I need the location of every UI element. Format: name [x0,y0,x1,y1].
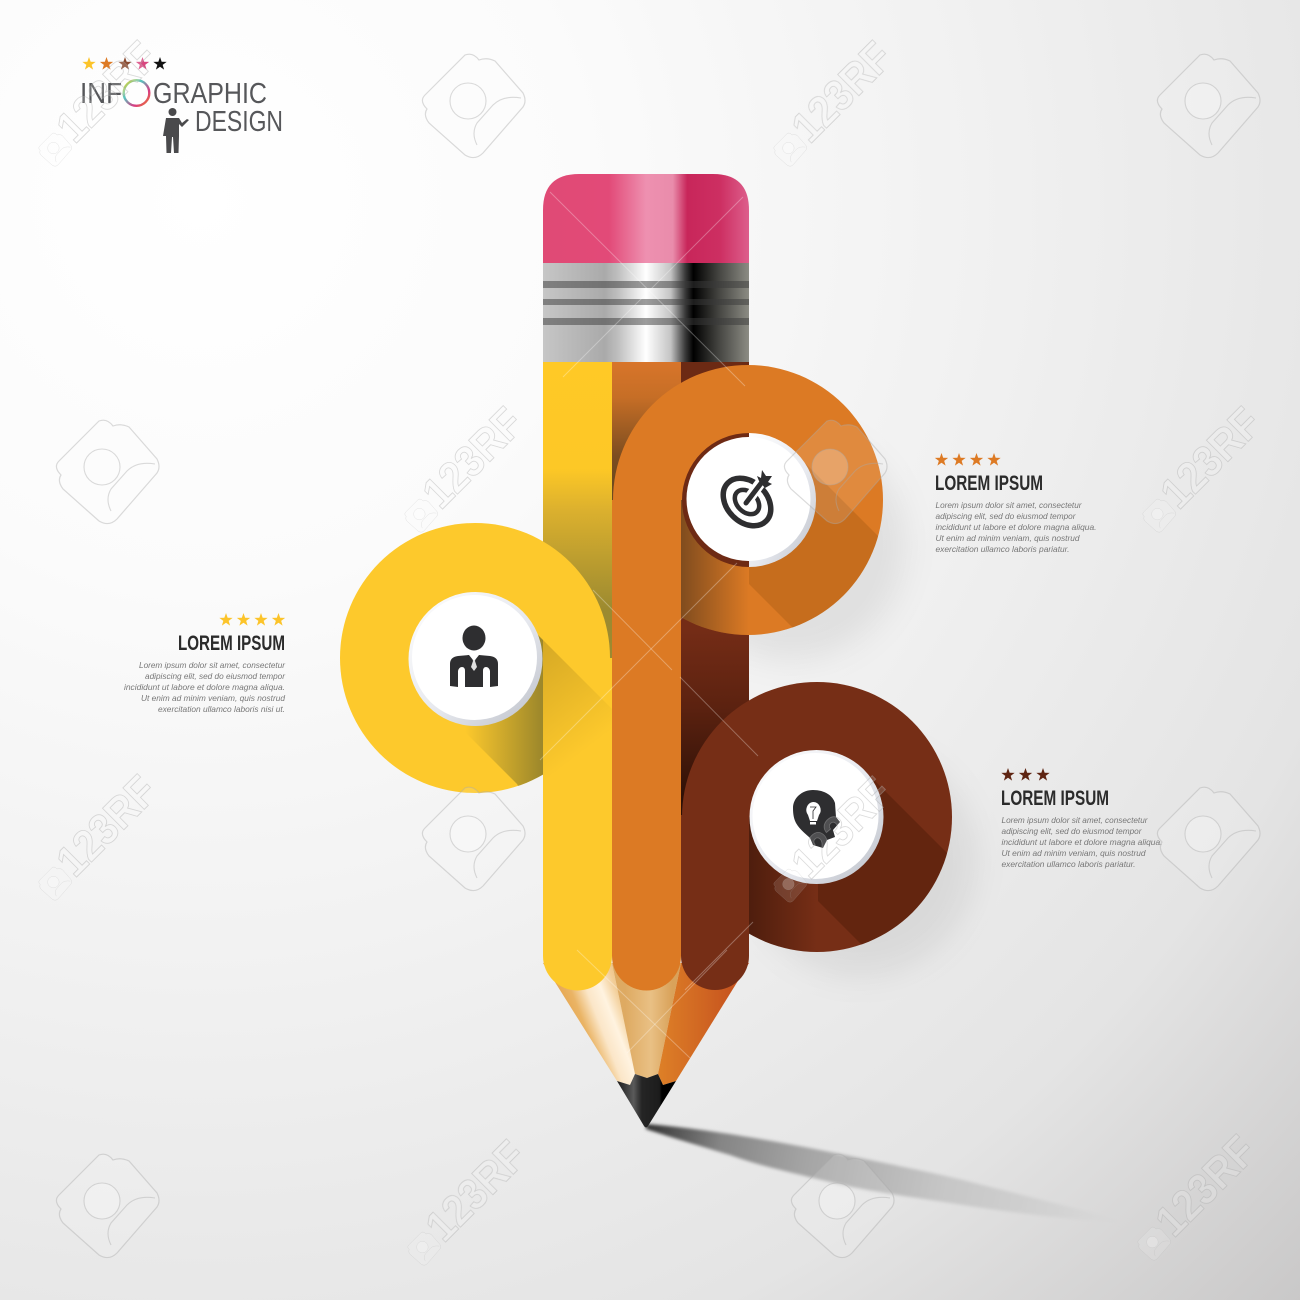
yellow long shadow on bar [543,640,612,780]
lower right body: adipiscing elit, sed do eiusmod tempor [1002,826,1143,836]
pencil tip: wood [543,963,749,1085]
logo ring letter [124,80,149,106]
watermarks: 123RF [413,398,533,518]
logo word: GRAPHIC: GRAPHIC [153,78,267,110]
icon badge: target [682,433,816,567]
pencil metal ferrule [543,263,749,362]
lower right stars [1001,768,1050,781]
upper right heading: LOREM IPSUM [935,472,1043,495]
text block: left [124,613,286,714]
watermarks: 123RF [1146,1126,1266,1246]
left body: Ut enim ad minim veniam, quis nostrud [141,693,285,703]
orange quadrant shading [681,500,743,634]
yellow bar upper [543,362,612,662]
left heading: LOREM IPSUM [178,632,285,655]
drop shadows behind circles [675,430,975,975]
panel: orange circle [612,365,900,991]
panel: brown circle [681,682,952,990]
pencil eraser [543,174,749,263]
upper right body: incididunt ut labore et dolore magna aliqua. [936,522,1096,532]
pencil shadow stroke [646,1124,1140,1225]
lower right body [1002,815,1162,869]
icon: head with lightbulb [793,790,840,848]
brown bar upper [681,362,749,402]
orange disc [613,365,883,635]
watermarks: 123RF [47,32,167,152]
upper right body [936,500,1096,554]
brown bar lower [681,815,749,990]
text block: upper right [935,453,1096,554]
text block: lower right [1001,768,1162,869]
orange long shadow [749,463,878,628]
watermarks: 123RF [47,766,167,886]
left body: exercitation ullamco laboris nisi ut. [158,704,285,714]
logo word: DESIGN: DESIGN [195,106,283,138]
pencil [543,174,749,1128]
yellow bar lower [543,658,612,990]
watermarks: 123RF [782,768,902,888]
upper right body: exercitation ullamco laboris pariatur. [936,544,1070,554]
left body [124,660,286,714]
left body: adipiscing elit, sed do eiusmod tempor [145,671,286,681]
pencil tip: graphite [617,1074,676,1128]
upper right stars [935,453,1001,466]
lower right body: Ut enim ad minim veniam, quis nostrud [1002,848,1146,858]
brown long shadow [818,774,947,944]
left stars [219,613,285,626]
yellow long shadow [472,635,543,786]
upper right body: adipiscing elit, sed do eiusmod tempor [936,511,1077,521]
lower right body: exercitation ullamco laboris pariatur. [1002,859,1136,869]
upper right body: Lorem ipsum dolor sit amet, consectetur [936,500,1083,510]
orange bar upper [612,362,681,502]
brown bar middle [681,590,749,820]
lower right heading: LOREM IPSUM [1001,787,1109,810]
orange bar lower [612,500,681,991]
brown quadrant shading [749,817,804,952]
logo person icon [163,108,189,153]
lower right body: incididunt ut labore et dolore magna aliqua. [1002,837,1162,847]
watermarks: 123RF [782,32,902,152]
left body: incididunt ut labore et dolore magna aliqua. [124,682,285,692]
logo: infographic design [80,57,283,153]
yellow disc [340,523,610,793]
left body: Lorem ipsum dolor sit amet, consectetur [139,660,286,670]
lower right body: Lorem ipsum dolor sit amet, consectetur [1002,815,1149,825]
upper right body: Ut enim ad minim veniam, quis nostrud [936,533,1080,543]
icon badge: person [408,592,542,726]
icon badge: head with bulb [750,750,884,884]
panel: yellow circle [340,523,612,990]
logo word: INF: INF [80,78,122,110]
brown disc [682,682,952,952]
logo stars [82,57,167,70]
icon: target with arrow [714,469,780,535]
watermarks: 123RF [416,1131,536,1251]
watermarks: 123RF [1151,398,1271,518]
icon: businessman [450,626,498,687]
